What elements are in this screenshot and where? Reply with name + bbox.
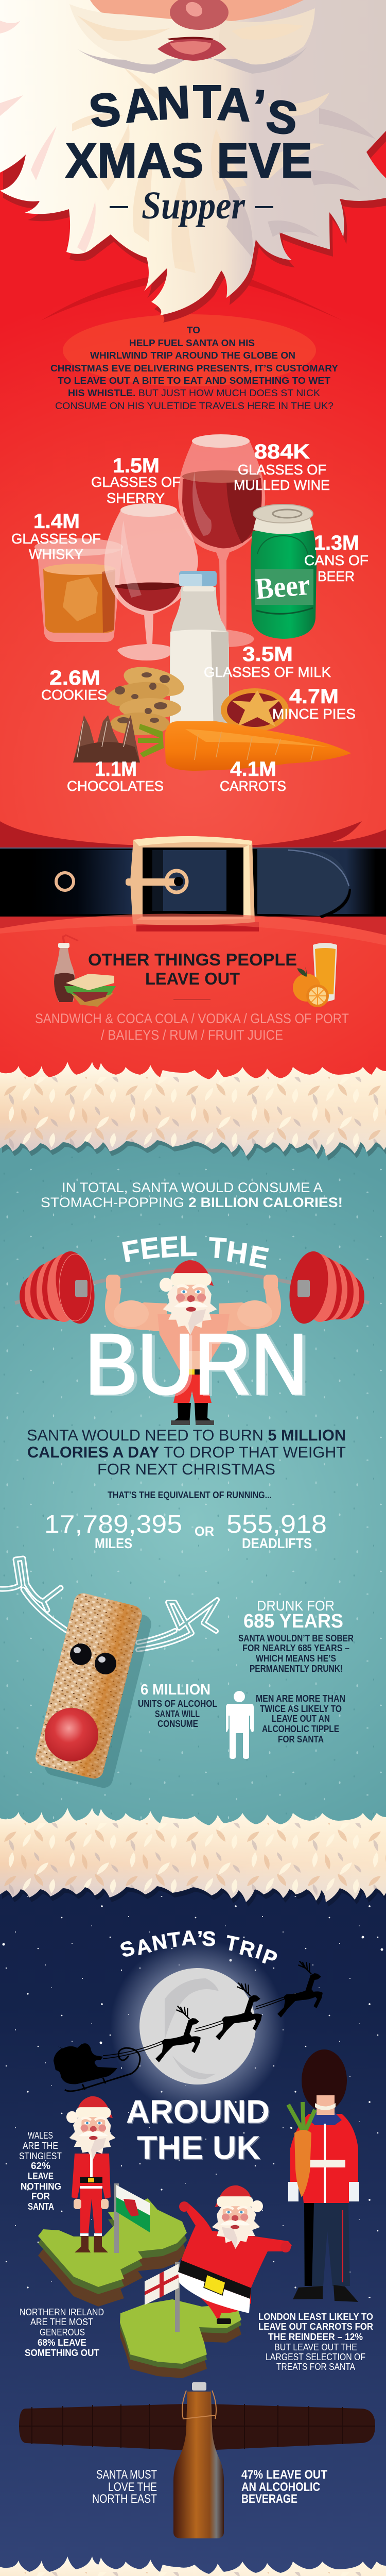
red nose xyxy=(45,1708,98,1761)
stat: drunk for 685 years: FOR NEARLY 685 YEARS – xyxy=(242,1643,349,1653)
stat: miles: MILES xyxy=(95,1535,132,1551)
stat: cookies: COOKIES xyxy=(41,687,107,703)
lower tunic highlight xyxy=(0,914,386,945)
snow speckle overlay xyxy=(0,1154,386,1824)
text: wales stingiest: ARE THE xyxy=(23,2141,58,2151)
text: london carrots: THE REINDEER – 12% xyxy=(268,2332,363,2342)
illustration: cookies xyxy=(104,662,187,735)
belt xyxy=(178,2260,251,2299)
illustration: beer can xyxy=(251,504,317,639)
fur trim: teal to navy xyxy=(0,1808,386,1907)
list text: SANDWICH & COCA COLA / VODKA / GLASS OF PORT xyxy=(35,1011,349,1026)
belt eyelet xyxy=(56,873,74,890)
heading: around the UK xyxy=(126,2094,270,2166)
text: wales stingiest xyxy=(19,2130,62,2212)
stat: mulled wine: 884K xyxy=(254,440,310,463)
icon: man xyxy=(226,1691,254,1759)
illustration: northern ireland map xyxy=(120,2262,241,2378)
panel: other things people leave out xyxy=(0,914,386,1043)
beard xyxy=(0,0,386,315)
title: Santa's Xmas Eve xyxy=(65,76,312,188)
panel: feel the burn xyxy=(0,1180,369,1790)
text: men more likely: FOR SANTA xyxy=(278,1734,324,1744)
intro text: WHIRLWIND TRIP AROUND THE GLOBE ON xyxy=(90,350,295,361)
trousers xyxy=(173,1375,212,1403)
stat: drunk for 685 years: WHICH MEANS HE’S xyxy=(256,1653,336,1664)
heading xyxy=(88,950,297,988)
muscular santa xyxy=(105,1260,281,1425)
nose xyxy=(170,0,229,30)
buckle frame xyxy=(126,836,255,925)
sleigh xyxy=(54,2043,117,2084)
text: northern ireland generous: SOMETHING OUT xyxy=(25,2348,99,2358)
intro calories text: STOMACH-POPPING 2 BILLION CALORIES! xyxy=(41,1195,343,1210)
stat: milk: 3.5M xyxy=(242,643,293,666)
burn calories statement: FOR NEXT CHRISTMAS xyxy=(97,1460,275,1478)
arms xyxy=(105,1275,281,1332)
heading: around the UK: THE UK xyxy=(137,2130,260,2166)
boots xyxy=(171,1403,214,1423)
text: london carrots: BUT LEAVE OUT THE xyxy=(274,2342,357,2352)
belt tail xyxy=(258,850,349,916)
list text: / BAILEYS / RUM / FRUIT JUICE xyxy=(101,1027,283,1043)
panel: santa's trip around the UK xyxy=(2,1927,383,2538)
text: london carrots xyxy=(258,2312,373,2372)
text: london carrots: LARGEST SELECTION OF xyxy=(266,2352,365,2362)
heading: OTHER THINGS PEOPLE xyxy=(88,950,297,969)
text: northern ireland generous: NORTHERN IRELAND xyxy=(20,2307,104,2317)
moon xyxy=(110,1939,285,2114)
stat: 6 million units xyxy=(138,1682,217,1729)
cork body xyxy=(33,1591,144,1781)
intro text: HIS WHISTLE. BUT JUST HOW MUCH DOES ST NICK xyxy=(68,387,321,398)
text: men more likely: TWICE AS LIKELY TO xyxy=(260,1704,342,1714)
stat: 6 million units: 6 MILLION xyxy=(141,1682,210,1698)
text: love the north east xyxy=(92,2468,157,2506)
illustration: beer can: Beer xyxy=(254,568,311,606)
stat: cookies xyxy=(41,667,107,703)
title: Santa's Xmas Eve: SANTA’S xyxy=(86,76,301,145)
text: men more likely xyxy=(256,1693,345,1744)
text: northern ireland generous: 68% LEAVE xyxy=(38,2337,86,2348)
stat: drunk for 685 years: DRUNK FOR xyxy=(257,1598,335,1614)
text: love the north east: SANTA MUST xyxy=(96,2468,157,2482)
heading: burn: BURN xyxy=(85,1317,308,1412)
text: london carrots: LEAVE OUT CARROTS FOR xyxy=(258,2321,373,2332)
illustration: angel of the north bottle xyxy=(19,2382,375,2538)
text: men more likely: ALCOHOLIC TIPPLE xyxy=(262,1724,339,1734)
santa face skin xyxy=(90,0,304,22)
icon: sandwich xyxy=(64,974,116,1007)
text: 47% alcoholic beverage: AN ALCOHOLIC xyxy=(241,2480,320,2494)
illustration: mulled wine glass xyxy=(178,434,265,647)
illustration: milk bottle xyxy=(170,571,229,732)
text: london carrots: TREATS FOR SANTA xyxy=(276,2362,355,2372)
fur trim: navy to sky xyxy=(0,2556,386,2576)
belt and buckle xyxy=(0,821,386,935)
stat: carrots xyxy=(220,758,286,794)
head xyxy=(160,1260,217,1335)
fur trim: red to teal xyxy=(0,1062,386,1161)
stat: 6 million units: CONSUME xyxy=(157,1719,198,1729)
subtitle: Supper: Supper xyxy=(142,184,245,227)
left antler xyxy=(0,1558,217,1650)
text: wales stingiest: FOR xyxy=(31,2191,50,2201)
title: Santa's Xmas Eve: XMAS EVE xyxy=(65,133,312,188)
icon: orange juice xyxy=(293,943,337,1007)
text: 47% alcoholic beverage: 47% LEAVE OUT xyxy=(241,2468,327,2482)
stat: cookies: 2.6M xyxy=(49,667,100,689)
illustration: chocolate bar xyxy=(73,715,140,762)
northern ireland flag xyxy=(145,2262,180,2332)
stat: drunk for 685 years: PERMANENTLY DRUNK! xyxy=(250,1664,343,1674)
intro calories text xyxy=(41,1180,343,1210)
text: northern ireland generous: GENEROUS xyxy=(40,2327,85,2337)
stat: drunk for 685 years xyxy=(238,1598,354,1674)
stat: whisky: 1.4M xyxy=(33,510,80,533)
illustration: wales map xyxy=(38,2183,187,2307)
text: men more likely: MEN ARE MORE THAN xyxy=(256,1693,345,1704)
belt xyxy=(180,1369,204,1375)
barbell xyxy=(15,1248,369,1327)
text: wales stingiest: WALES xyxy=(28,2130,53,2141)
stat: carrots: 4.1M xyxy=(230,758,276,781)
heading: santa's trip: SANTA’S TRIP xyxy=(117,1927,280,1971)
stat: beer: 1.3M xyxy=(314,532,359,554)
illustration: cork reindeer xyxy=(0,1558,217,1790)
welsh santa xyxy=(66,2096,115,2252)
stat: beer: CANS OF xyxy=(304,552,369,568)
stat: sherry: 1.5M xyxy=(113,454,160,477)
chest creases xyxy=(41,276,342,320)
text: love the north east: NORTH EAST xyxy=(92,2492,157,2506)
stat: carrots: CARROTS xyxy=(220,778,286,794)
text: wales stingiest: NOTHING xyxy=(21,2181,61,2192)
intro calories text: IN TOTAL, SANTA WOULD CONSUME A xyxy=(62,1180,323,1195)
illustration: sherry glass xyxy=(104,503,198,660)
icon: cola bottle xyxy=(54,935,78,1002)
burn calories statement: CALORIES A DAY TO DROP THAT WEIGHT xyxy=(27,1443,346,1461)
burn calories statement: SANTA WOULD NEED TO BURN 5 MILLION xyxy=(27,1426,346,1444)
stat: chocolates xyxy=(67,758,164,794)
buckle shadow xyxy=(136,922,259,931)
stat: deadlifts: DEADLIFTS xyxy=(242,1535,312,1551)
text: northern ireland generous: ARE THE MOST xyxy=(30,2317,93,2327)
text: 47% alcoholic beverage xyxy=(241,2468,327,2506)
stat: miles xyxy=(44,1511,182,1551)
stat: deadlifts: 555,918 xyxy=(226,1511,327,1538)
text: wales stingiest: LEAVE xyxy=(28,2171,54,2181)
stat labels: food and drink counts xyxy=(11,440,369,794)
stat: mulled wine xyxy=(234,440,330,493)
night stars overlay xyxy=(0,1896,386,2298)
stat: chocolates: CHOCOLATES xyxy=(67,778,164,794)
sparkle stars xyxy=(2,1936,383,2129)
reindeer and sleigh silhouettes xyxy=(54,1961,323,2091)
mouth xyxy=(157,37,226,61)
moustache xyxy=(69,4,315,74)
stat: sherry xyxy=(91,454,181,506)
panel: teal background xyxy=(0,1108,386,1865)
text: wales stingiest: 62% xyxy=(31,2161,50,2171)
illustration: mince pie xyxy=(221,688,289,732)
stat: 6 million units: UNITS OF ALCOHOL xyxy=(138,1699,217,1709)
intro text: TO xyxy=(187,325,200,335)
intro text xyxy=(50,325,339,411)
stat: mulled wine: MULLED WINE xyxy=(234,477,330,493)
text: love the north east: LOVE THE xyxy=(108,2480,157,2494)
stat: mince pies: 4.7M xyxy=(289,685,339,708)
bottle xyxy=(173,2392,224,2538)
eyes xyxy=(70,1643,116,1674)
stat: drunk for 685 years: SANTA WOULDN’T BE SOBER xyxy=(238,1633,354,1643)
stat: sherry: GLASSES OF xyxy=(91,474,181,490)
dancing santa xyxy=(178,2185,292,2324)
heading: around the UK: AROUND xyxy=(126,2094,270,2130)
stat: beer: BEER xyxy=(318,568,355,584)
panel: red suit background xyxy=(0,0,386,1113)
stat: whisky: WHISKY xyxy=(29,546,83,562)
stat: chocolates: 1.1M xyxy=(95,758,137,781)
stat: whisky xyxy=(11,510,101,562)
stat: mince pies: MINCE PIES xyxy=(272,706,356,722)
or: OR xyxy=(195,1523,214,1539)
burn calories statement xyxy=(27,1426,346,1478)
list text xyxy=(35,1011,349,1043)
chest highlight xyxy=(63,314,316,386)
stat: drunk for 685 years: 685 YEARS xyxy=(243,1611,343,1632)
text: london carrots: LONDON LEAST LIKELY TO xyxy=(258,2312,373,2322)
cork shadow xyxy=(43,1601,153,1790)
text: northern ireland generous xyxy=(20,2307,104,2358)
stat: beer xyxy=(304,532,369,584)
panel: navy night background xyxy=(0,1855,386,2576)
text: wales stingiest: SANTA xyxy=(28,2201,54,2212)
heading: LEAVE OUT xyxy=(145,969,240,988)
panel: santa beard hero xyxy=(0,0,386,386)
intro text: CHRISTMAS EVE DELIVERING PRESENTS, IT’S CUSTOMARY xyxy=(50,363,339,374)
intro text: TO LEAVE OUT A BITE TO EAT AND SOMETHING TO WET xyxy=(58,375,331,386)
stat: miles: 17,789,395 xyxy=(44,1511,182,1538)
guardsman with carrot xyxy=(288,2049,359,2302)
left weight plates xyxy=(20,1248,100,1327)
welsh flag xyxy=(114,2183,150,2253)
stat: milk xyxy=(204,643,331,680)
carrot xyxy=(288,2102,315,2197)
intro text: HELP FUEL SANTA ON HIS xyxy=(129,337,255,348)
angel wings xyxy=(19,2404,375,2450)
right weight plates xyxy=(284,1248,364,1327)
torso xyxy=(157,1314,230,1370)
illustration: carrot xyxy=(138,721,351,771)
stat: milk: GLASSES OF MILK xyxy=(204,664,331,680)
text: men more likely: LEAVE OUT AN xyxy=(272,1714,330,1724)
illustration: whisky tumbler xyxy=(34,538,123,642)
stat: sherry: SHERRY xyxy=(107,490,165,506)
text: 47% alcoholic beverage: BEVERAGE xyxy=(241,2492,297,2506)
heading: feel the: FEEL THE xyxy=(119,1229,271,1275)
stat: 6 million units: SANTA WILL xyxy=(155,1709,200,1719)
equivalence line: THAT’S THE EQUIVALENT OF RUNNING... xyxy=(108,1490,272,1500)
intro text: CONSUME ON HIS YULETIDE TRAVELS HERE IN THE UK? xyxy=(55,400,334,411)
text: wales stingiest: STINGIEST xyxy=(19,2151,62,2161)
beard shadow xyxy=(3,7,386,323)
mittens xyxy=(179,2201,189,2212)
stat: mulled wine: GLASSES OF xyxy=(238,462,326,478)
stat: mince pies xyxy=(272,685,356,722)
stat: whisky: GLASSES OF xyxy=(11,531,101,547)
stat: deadlifts xyxy=(226,1511,327,1551)
beard strands xyxy=(0,21,376,273)
